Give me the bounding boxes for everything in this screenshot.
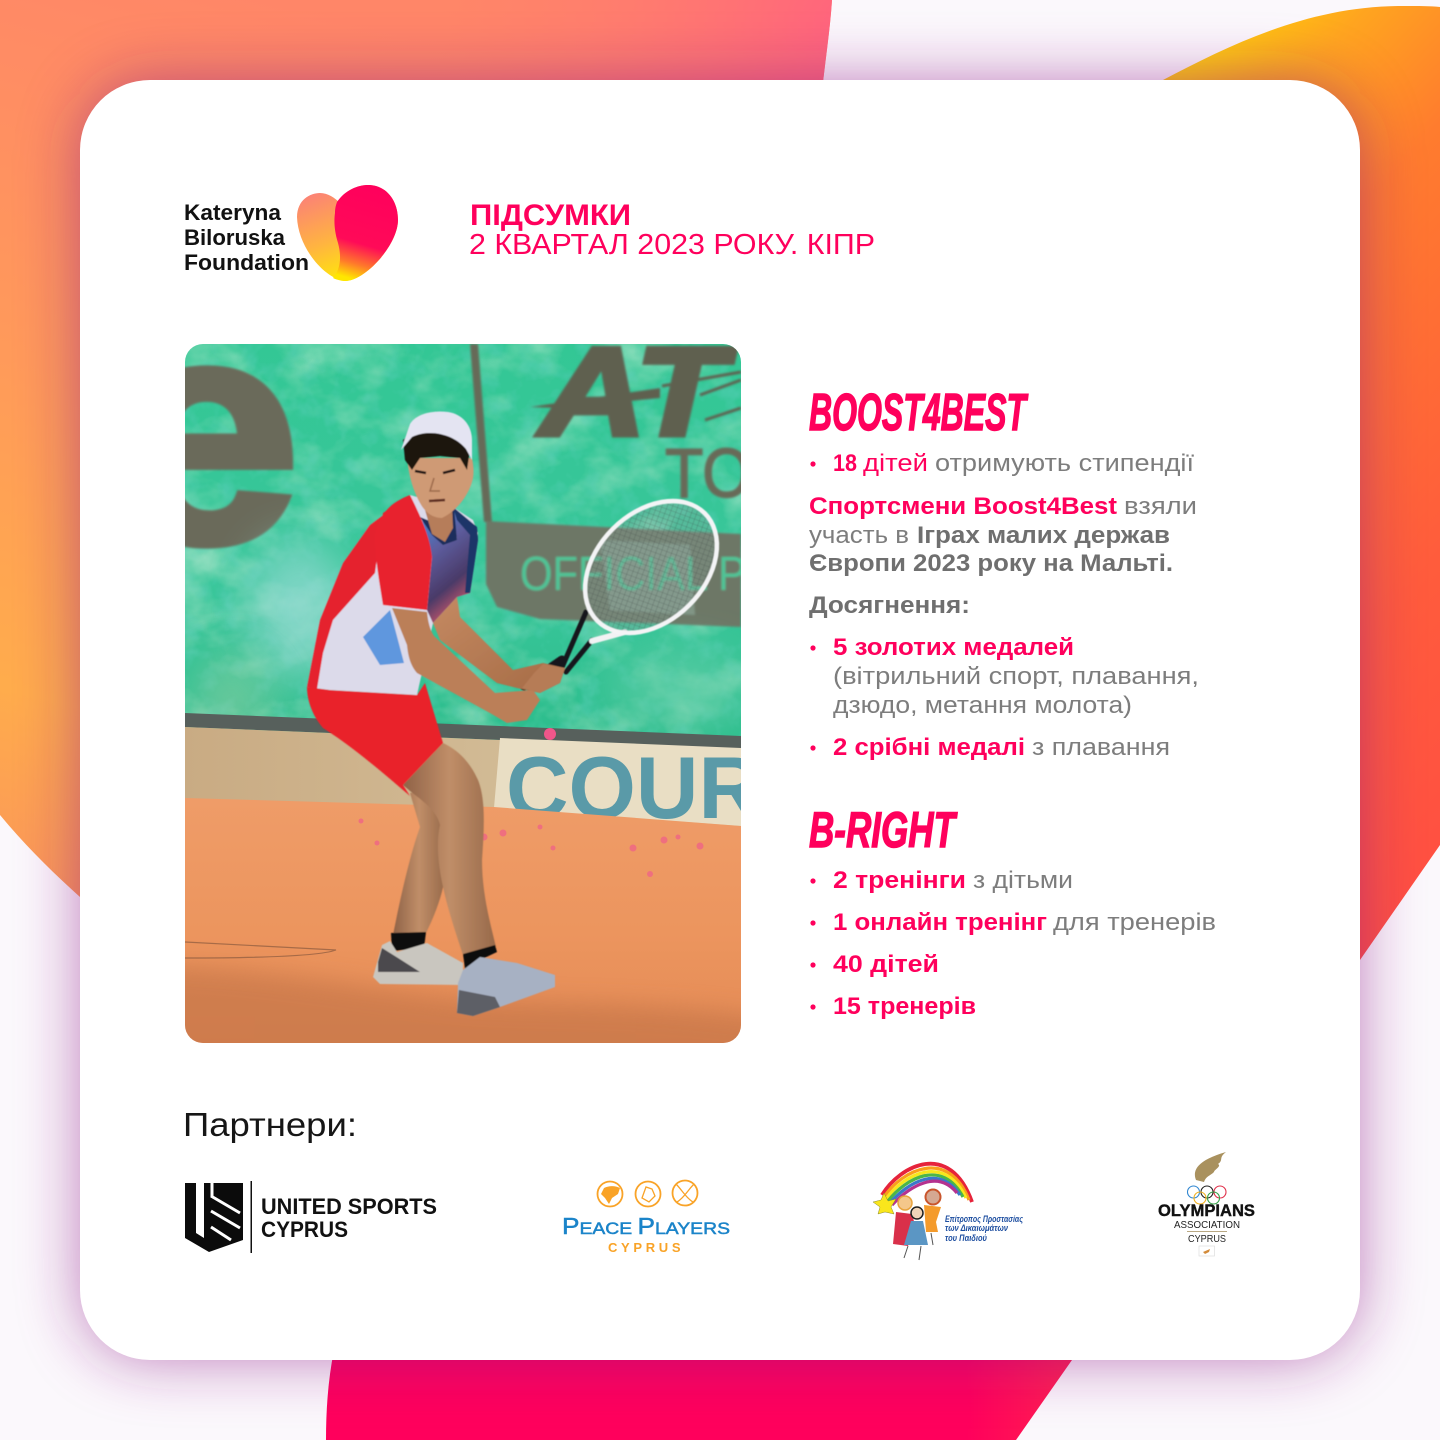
dark rail xyxy=(185,713,741,750)
clay court xyxy=(185,798,741,1043)
partner logo: Olympians Association Cyprus xyxy=(1158,1152,1255,1256)
shirt blue shade xyxy=(363,610,404,665)
back arm xyxy=(433,597,565,693)
text block: B-Right results xyxy=(810,867,1216,1020)
rainbow xyxy=(882,1164,972,1205)
Greek caption xyxy=(945,1214,1023,1243)
collar xyxy=(420,507,457,545)
shirt side panel xyxy=(306,511,386,690)
decorative heart blob: right lobe xyxy=(1163,6,1440,1000)
text block: achievements: (вітрильний спорт, плавання, xyxy=(833,663,1199,690)
card shadow xyxy=(80,80,1360,1360)
logo heart xyxy=(297,185,398,281)
text block: achievements: дзюдо, метання молота) xyxy=(833,692,1132,719)
shirt chest xyxy=(422,507,478,623)
player xyxy=(307,412,743,1016)
shirt sleeve xyxy=(375,495,432,610)
partner logo: Olympians Association Cyprus: OLYMPIANS xyxy=(1158,1201,1255,1220)
text block: B-Right results: 1 онлайн тренінг xyxy=(833,909,1047,936)
text block: Games of the Small States: Іграх малих держав xyxy=(917,522,1170,549)
partner logo: PeacePlayers Cyprus: CYPRUS xyxy=(608,1240,684,1255)
racket throat and handle xyxy=(524,612,625,686)
shadows on clay xyxy=(185,962,741,1043)
title xyxy=(469,199,875,261)
photo: young tennis player on a clay court xyxy=(185,344,741,1043)
text block: scholarships: дітей xyxy=(863,450,928,477)
eyes, nose and mouth xyxy=(415,470,455,501)
partner logo: United Sports Cyprus xyxy=(185,1181,437,1253)
flame xyxy=(1195,1152,1226,1182)
heading: partners: Партнери: xyxy=(183,1106,357,1143)
wall lettering: AT xyxy=(537,321,736,462)
back shoe xyxy=(373,941,463,985)
text block: Games of the Small States: Європи 2023 року на Мальті. xyxy=(809,550,1173,577)
text block: Games of the Small States xyxy=(809,493,1197,577)
logo wordmark: Foundation xyxy=(184,250,309,275)
partner logo: Olympians Association Cyprus: ASSOCIATION xyxy=(1174,1219,1240,1231)
cap xyxy=(401,412,472,460)
text block: B-Right results: 40 дітей xyxy=(833,951,939,978)
partner logo: PeacePlayers Cyprus: PEACE PLAYERS xyxy=(562,1213,730,1239)
shorts xyxy=(307,683,443,796)
neck xyxy=(425,505,453,542)
title: 2 КВАРТАЛ 2023 РОКУ. КІПР xyxy=(469,229,875,261)
partner logo: PeacePlayers Cyprus xyxy=(562,1180,730,1255)
text block: scholarships: 18 xyxy=(833,450,857,477)
partner logo: United Sports Cyprus: UNITED SPORTS xyxy=(261,1194,437,1219)
painted court sign xyxy=(494,738,741,826)
text block: Games of the Small States: взяли xyxy=(1124,493,1197,520)
Greek caption: των Δικαιωμάτων xyxy=(945,1223,1008,1233)
USC shield xyxy=(185,1183,243,1252)
text block: achievements: 5 золотих медалей xyxy=(833,634,1074,661)
text block: B-Right results: 15 тренерів xyxy=(833,993,976,1020)
decorative heart blob: left lobe xyxy=(0,0,832,900)
pale wall patches xyxy=(250,540,350,680)
olympic rings xyxy=(1188,1186,1226,1204)
white card xyxy=(80,80,1360,1360)
socks xyxy=(390,932,498,969)
Greek caption: του Παιδιού xyxy=(945,1233,987,1243)
section heading: BOOST4BEST: BOOST4BEST xyxy=(809,384,1029,442)
section heading: B-RIGHT: B-RIGHT xyxy=(809,802,958,858)
logo: Kateryna Biloruska Foundation xyxy=(184,185,398,281)
racket head xyxy=(582,498,720,636)
text block: Games of the Small States: Спортсмени Boost4Best xyxy=(809,493,1117,520)
wall lettering: e xyxy=(108,254,300,609)
star xyxy=(873,1193,896,1214)
partner logo: United Sports Cyprus: CYPRUS xyxy=(261,1217,348,1242)
Greek caption: Επίτροπος Προστασίας xyxy=(945,1214,1023,1224)
children xyxy=(893,1190,941,1260)
wall lettering: TO xyxy=(665,434,751,512)
hand on racket xyxy=(522,664,565,693)
text block: B-Right results: для тренерів xyxy=(1053,909,1216,936)
title: ПІДСУМКИ xyxy=(470,199,631,232)
logo wordmark xyxy=(184,200,309,275)
front leg xyxy=(403,743,496,955)
text block: B-Right results: 2 тренінги xyxy=(833,867,966,894)
fallen petals xyxy=(358,728,704,877)
logo wordmark: Biloruska xyxy=(184,225,286,250)
face xyxy=(407,458,474,518)
wall lettering: OFFICIAL P xyxy=(520,548,746,601)
decorative heart blob: bottom xyxy=(326,1350,1079,1440)
shirt body xyxy=(307,495,478,695)
text block: achievements: з плавання xyxy=(1032,734,1170,761)
text block: achievements xyxy=(809,592,1199,761)
text block: achievements: 2 срібні медалі xyxy=(833,734,1025,761)
wall lettering xyxy=(185,344,741,628)
text block: scholarships xyxy=(810,450,1194,477)
front shoe xyxy=(457,957,555,1016)
front arm and hand xyxy=(392,608,540,723)
back leg xyxy=(393,790,445,935)
partner logo: Commissioner for Children's Rights xyxy=(873,1164,1023,1260)
green wall xyxy=(185,344,741,744)
Cyprus flag xyxy=(1199,1246,1214,1256)
text block: achievements: Досягнення: xyxy=(809,592,970,619)
text block: scholarships: отримують стипендії xyxy=(935,450,1194,477)
text block: B-Right results: з дітьми xyxy=(973,867,1073,894)
hair xyxy=(403,431,470,470)
concrete kerb xyxy=(185,727,741,830)
partner logo: Olympians Association Cyprus: CYPRUS xyxy=(1188,1233,1226,1245)
photo: young tennis player on a clay court: COUR xyxy=(506,738,761,837)
PeacePlayers icons xyxy=(598,1180,698,1206)
logo wordmark: Kateryna xyxy=(184,200,282,225)
text block: Games of the Small States: участь в xyxy=(809,522,909,549)
